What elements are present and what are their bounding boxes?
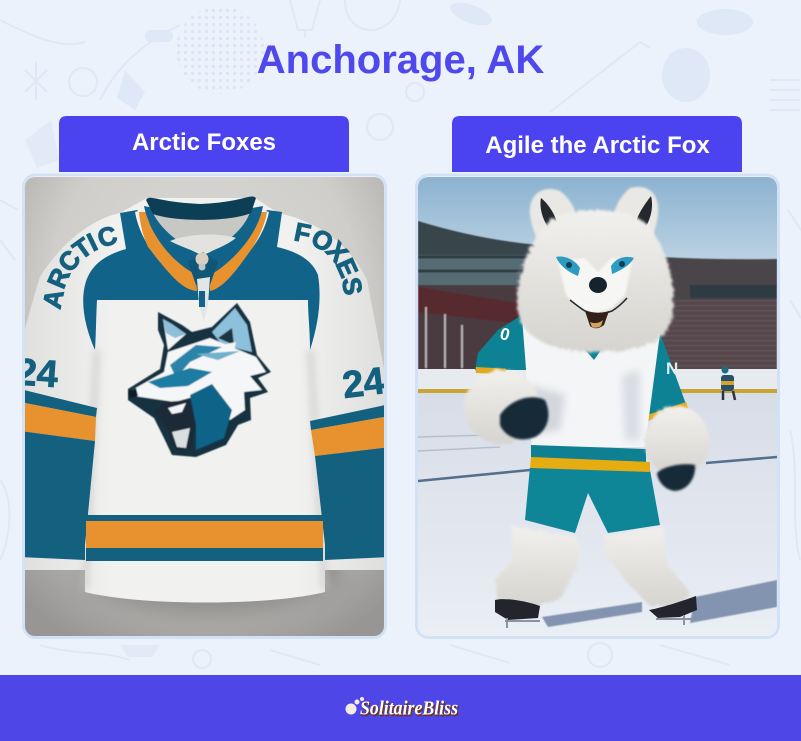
muzzle bbox=[558, 258, 632, 314]
jersey shadow bbox=[80, 570, 343, 620]
tab heading: Arctic Foxes: Arctic Foxes bbox=[132, 129, 276, 156]
jersey torso bbox=[522, 317, 660, 447]
collar V bbox=[582, 346, 604, 360]
body hem stripes bbox=[86, 515, 323, 521]
skates bbox=[495, 599, 540, 620]
shoulder yoke bbox=[83, 210, 320, 350]
collar orange trim bbox=[139, 212, 197, 291]
gloves bbox=[500, 397, 548, 439]
skate shadow left bbox=[542, 602, 642, 627]
right sleeve bbox=[649, 334, 686, 414]
neck opening bbox=[154, 214, 250, 239]
left arm fur bbox=[464, 370, 540, 444]
sleeve number left: 0 bbox=[498, 324, 512, 345]
panel: jersey image bbox=[14, 175, 390, 638]
ears bbox=[530, 189, 578, 255]
lace bbox=[197, 277, 210, 322]
stadium bbox=[418, 221, 777, 372]
tab heading: Agile the Arctic Fox: Agile the Arctic Fox bbox=[485, 132, 710, 159]
collar white trim bbox=[135, 211, 269, 262]
icon: wolf logo bbox=[128, 303, 271, 457]
shorts bbox=[525, 467, 660, 533]
rink boards bbox=[418, 369, 777, 391]
ice surface bbox=[418, 393, 777, 636]
collar emblem bbox=[188, 252, 218, 285]
studio backdrop bbox=[25, 177, 384, 636]
icon: hockey jersey bbox=[14, 197, 390, 602]
footer bar bbox=[0, 675, 801, 741]
sleeve number left: 24 bbox=[14, 351, 59, 396]
rink lines bbox=[418, 457, 777, 481]
left leg fur bbox=[495, 526, 580, 606]
collar back bbox=[146, 197, 256, 220]
footer logo: SolitaireBliss bbox=[361, 699, 459, 721]
left sleeve stripes bbox=[20, 389, 97, 417]
eyes bbox=[556, 257, 580, 276]
distant player bbox=[721, 366, 735, 400]
right sleeve stripes bbox=[310, 405, 384, 430]
sky bbox=[418, 177, 777, 287]
left sleeve bbox=[475, 313, 527, 370]
neck collar teal bbox=[144, 206, 263, 290]
right arm fur bbox=[645, 406, 709, 476]
jersey body and sleeves bbox=[20, 198, 390, 602]
tab heading: Arctic Foxes bbox=[59, 116, 349, 172]
nose bbox=[589, 277, 607, 293]
skate shadow right bbox=[690, 580, 777, 623]
sleeve text: FOXES: FOXES bbox=[292, 216, 368, 297]
sleeve text: ARCTIC: ARCTIC bbox=[37, 219, 121, 311]
sleeve number right: 24 bbox=[340, 360, 387, 407]
mouth bbox=[570, 298, 627, 314]
tab heading: Agile the Arctic Fox bbox=[452, 116, 742, 172]
head fur bbox=[517, 210, 674, 352]
title: Anchorage, AK bbox=[257, 38, 544, 82]
right leg fur bbox=[604, 526, 690, 606]
panel: mascot image bbox=[416, 175, 778, 638]
jersey hem stripes bbox=[531, 445, 646, 462]
sleeve number right: N bbox=[666, 359, 678, 378]
footer logo: SolitaireBliss bbox=[360, 698, 458, 720]
icon: arctic fox mascot bbox=[464, 187, 709, 628]
body seams bbox=[85, 350, 325, 590]
